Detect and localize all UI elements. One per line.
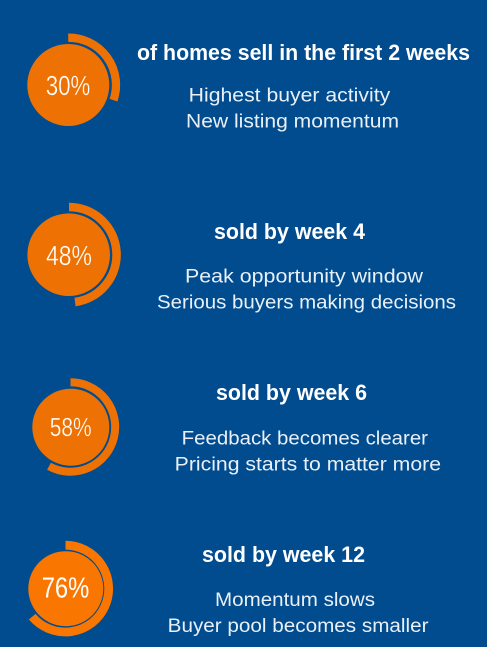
panel: 58 percent stat <box>32 380 441 476</box>
heading: week 6: sold by week 6 <box>216 380 367 405</box>
donut: 58%: 58% <box>50 412 92 442</box>
text block: feedback and pricing <box>175 428 441 476</box>
text block: buyer activity: New listing momentum <box>186 112 399 133</box>
donut: 58% <box>32 382 115 472</box>
text block: peak opportunity: Serious buyers making decisions <box>157 292 456 313</box>
text block: buyer activity <box>186 86 399 133</box>
donut: 48% <box>27 207 117 302</box>
panel: 30 percent stat <box>27 38 470 133</box>
panel: 76 percent stat <box>28 542 429 637</box>
text block: feedback and pricing: Feedback becomes clearer <box>182 428 429 449</box>
panel: 48 percent stat <box>27 207 456 313</box>
donut: 76%: 76% <box>42 573 89 605</box>
text block: feedback and pricing: Pricing starts to matter more <box>175 455 441 476</box>
text block: peak opportunity: Peak opportunity window <box>185 267 423 288</box>
heading: week 12: sold by week 12 <box>202 542 365 567</box>
donut: 30% <box>27 38 116 126</box>
donut: 30%: 30% <box>46 70 90 101</box>
text block: momentum slows: Buyer pool becomes smaller <box>168 616 429 637</box>
heading: week 4: sold by week 4 <box>214 219 366 244</box>
text block: momentum slows <box>168 590 429 637</box>
heading: first 2 weeks: of homes sell in the first 2 weeks <box>137 40 470 65</box>
donut: 48%: 48% <box>46 240 92 271</box>
text block: buyer activity: Highest buyer activity <box>189 86 391 107</box>
text block: peak opportunity <box>157 267 456 313</box>
text block: momentum slows: Momentum slows <box>215 590 375 611</box>
donut: 76% <box>28 545 109 632</box>
